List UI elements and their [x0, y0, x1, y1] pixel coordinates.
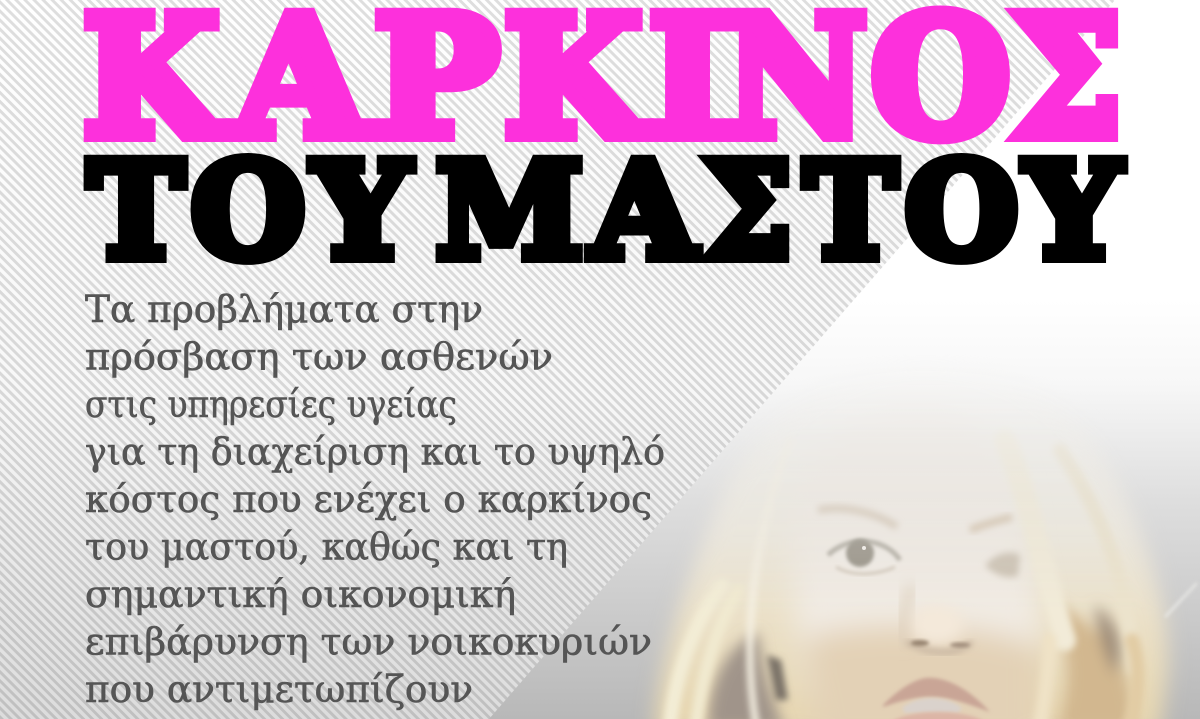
- title: black line: Σ: [704, 134, 792, 289]
- body text block: πρόσβαση των ασθενών: [85, 336, 553, 378]
- left eye: [828, 539, 900, 574]
- body text block: σημαντική οικονομική: [85, 573, 516, 616]
- body text block: [85, 288, 665, 711]
- body text block: κόστος που ενέχει ο καρκίνος: [85, 478, 652, 521]
- hair shadows: [708, 600, 1132, 719]
- left eyebrow: [818, 508, 897, 527]
- title: black line: Τ: [804, 134, 897, 289]
- title: black line: Τ: [88, 134, 184, 289]
- title: black line: Ο: [191, 134, 305, 289]
- face: [790, 549, 1045, 686]
- nose: [902, 585, 972, 652]
- stray hair highlight: [1165, 583, 1197, 617]
- photo: woman's face: [646, 434, 1197, 719]
- body text block: που αντιμετωπίζουν: [85, 668, 473, 711]
- title: black line: Υ: [1023, 134, 1123, 289]
- body text block: επιβάρυνση των νοικοκυριών: [85, 620, 652, 664]
- title: black line: Α: [589, 134, 698, 289]
- dark hair gap: [767, 655, 788, 700]
- mouth: [883, 678, 990, 719]
- title: black line: Υ: [311, 134, 412, 289]
- title: black line: Μ: [436, 134, 583, 289]
- title: black line: Ο: [905, 134, 1018, 289]
- right eye: [985, 553, 1020, 577]
- hair strands: [670, 440, 1138, 719]
- body text block: Τα προβλήματα στην: [85, 288, 483, 331]
- hair mass: [646, 473, 1176, 719]
- body text block: για τη διαχείριση και το υψηλό: [85, 430, 665, 474]
- body text block: του μαστού, καθώς και τη: [85, 526, 568, 568]
- right eyebrow: [970, 517, 1012, 530]
- body text block: στις υπηρεσίες υγείας: [85, 383, 457, 426]
